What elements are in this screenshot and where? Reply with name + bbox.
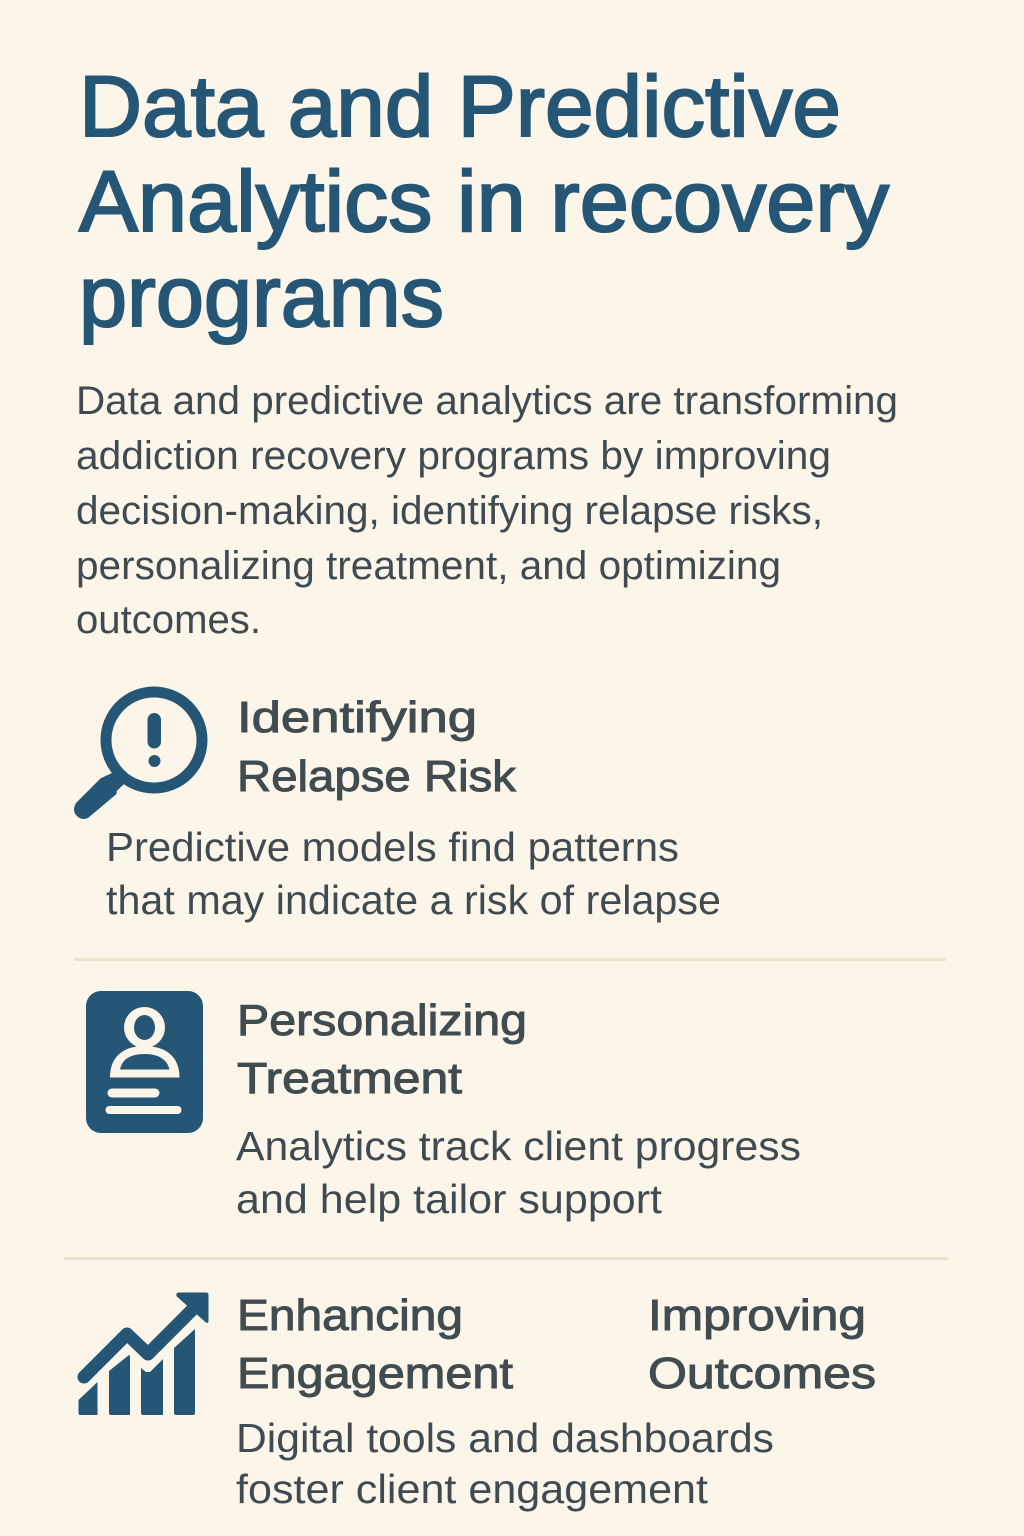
intro paragraph: personalizing treatment, and optimizing xyxy=(76,544,781,588)
heading: enhancing engagement: Enhancing xyxy=(237,1291,463,1340)
description: enhancing engagement xyxy=(236,1415,774,1512)
intro paragraph xyxy=(76,379,898,642)
heading: improving outcomes: Improving xyxy=(648,1291,866,1340)
heading: enhancing engagement: Engagement xyxy=(237,1349,513,1398)
heading: personalizing treatment: Personalizing xyxy=(237,996,527,1045)
panel: identifying relapse risk xyxy=(74,692,721,923)
intro paragraph: decision-making, identifying relapse risks, xyxy=(76,489,823,533)
heading: personalizing treatment xyxy=(237,996,527,1103)
panel: personalizing treatment xyxy=(86,991,801,1222)
heading: identifying relapse risk: Identifying xyxy=(237,693,477,742)
heading: personalizing treatment: Treatment xyxy=(237,1054,462,1103)
intro paragraph: outcomes. xyxy=(76,598,261,642)
heading: improving outcomes: Outcomes xyxy=(648,1349,876,1398)
description: relapse risk: that may indicate a risk of relapse xyxy=(106,877,721,923)
heading: identifying relapse risk xyxy=(237,693,517,801)
panel: enhancing engagement and improving outcomes xyxy=(78,1291,876,1512)
title: programs xyxy=(79,249,444,345)
heading: enhancing engagement xyxy=(237,1291,513,1398)
description: personalizing treatment: Analytics track client progress xyxy=(236,1123,801,1169)
icon: rising bar chart with arrow xyxy=(78,1293,208,1415)
description: enhancing engagement: foster client engagement xyxy=(236,1466,709,1512)
intro paragraph: addiction recovery programs by improving xyxy=(76,434,831,478)
icon: client profile card xyxy=(86,991,203,1133)
description: relapse risk xyxy=(106,824,721,923)
heading: identifying relapse risk: Relapse Risk xyxy=(237,752,517,801)
title: Analytics in recovery xyxy=(79,154,889,250)
description: relapse risk: Predictive models find patterns xyxy=(106,824,679,870)
title xyxy=(79,59,889,345)
description: enhancing engagement: Digital tools and dashboards xyxy=(236,1415,774,1461)
title: Data and Predictive xyxy=(79,59,841,155)
description: personalizing treatment: and help tailor support xyxy=(236,1176,663,1222)
heading: improving outcomes xyxy=(648,1291,876,1398)
description: personalizing treatment xyxy=(236,1123,801,1222)
intro paragraph: Data and predictive analytics are transforming xyxy=(76,379,898,423)
icon: magnifying glass with exclamation mark xyxy=(74,692,202,819)
